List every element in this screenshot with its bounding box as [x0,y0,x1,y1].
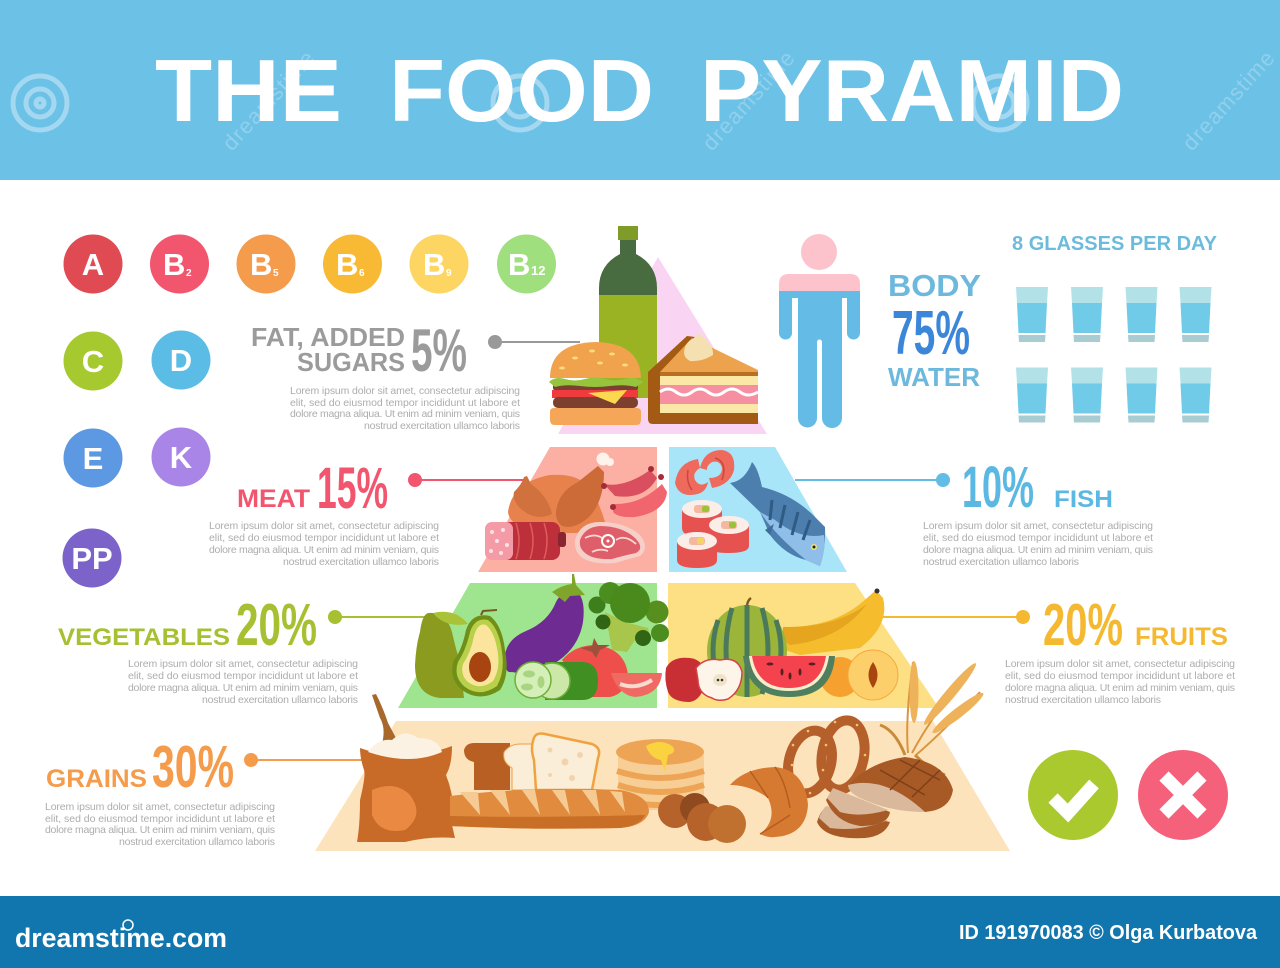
fish heading: 10% [962,455,1034,520]
vitamin B9: B [423,247,445,282]
fat description: Lorem ipsum dolor sit amet, consectetur adipiscing [290,385,520,397]
body water figure [779,234,981,428]
icon: roast chicken [508,452,614,533]
icon: sushi rolls [677,500,749,568]
icon: apple [665,658,742,702]
vegetables section [58,592,425,706]
vitamin B2: 2 [186,268,192,279]
fat heading [251,317,467,384]
icon: peach half [848,650,898,700]
grains heading: GRAINS [46,765,147,793]
meat connector [408,473,525,487]
icon: person [779,234,860,428]
fruits connector [880,610,1030,624]
header banner: dreamstime [697,46,799,155]
fruits heading: 20% [1043,592,1123,658]
fish description: nostrud exercitation ullamco laboris [923,556,1079,568]
vitamin B2 [150,234,209,294]
icon: watermelon slice [743,656,835,697]
fruits description: dolore magna aliqua. Ut enim ad minim veniam, quis [1005,682,1235,694]
icon: orange [820,657,860,697]
icon: bread and slices [464,734,599,790]
grains description [45,801,275,848]
vitamin B2: B [163,247,185,282]
body water text [888,268,981,392]
vitamin E [64,428,122,488]
vegetables description: elit, sed do eiusmod tempor incididunt ut labore et [128,670,358,682]
vitamin B5 [236,234,296,294]
fish heading: FISH [1054,486,1113,513]
icon: whole watermelon [707,598,787,697]
body water text: WATER [888,362,980,392]
icon: broccoli [588,582,669,652]
fruits description: Lorem ipsum dolor sit amet, consectetur adipiscing [1005,658,1235,670]
icon: baguette [450,789,649,829]
title: FOOD [389,41,654,140]
icon: eggplant [505,574,585,673]
vitamin D [152,330,210,390]
vegetables heading [58,592,317,658]
glasses heading: 8 GLASSES PER DAY [1012,233,1218,255]
fruits heading [1043,592,1228,658]
vitamin C: C [82,344,104,379]
icon: challah [658,793,746,843]
pyramid tier backgrounds [315,257,1010,851]
header banner: dreamstime [217,46,319,155]
fruits heading: FRUITS [1135,623,1228,651]
vitamin B5: B [250,247,272,282]
fruits section [880,592,1235,706]
fat description: dolore magna aliqua. Ut enim ad minim veniam, quis [290,408,520,420]
vitamin B5: 5 [273,268,279,279]
fat description: nostrud exercitation ullamco laboris [364,420,520,432]
vitamin PP: PP [71,541,113,576]
vitamin K [152,428,210,486]
vitamin E: E [83,441,103,476]
title: PYRAMID [700,41,1124,140]
grains description: dolore magna aliqua. Ut enim ad minim veniam, quis [45,824,275,836]
vitamin B9 [410,234,468,294]
header banner: dreamstime [1177,46,1279,155]
vegetables description: dolore magna aliqua. Ut enim ad minim veniam, quis [128,682,358,694]
icon: croissant [730,767,808,837]
grains heading [46,734,234,800]
meat description: dolore magna aliqua. Ut enim ad minim veniam, quis [209,544,439,556]
vitamin B12: B [508,247,530,282]
fruits description: nostrud exercitation ullamco laboris [1005,694,1161,706]
vitamin PP [62,528,122,588]
title: THE [155,41,342,140]
icon: tomato [562,638,628,697]
meat section [209,456,525,568]
icon: burger [549,342,643,425]
vegetables heading: VEGETABLES [58,624,230,651]
title [155,41,1124,140]
fish description: dolore magna aliqua. Ut enim ad minim veniam, quis [923,544,1153,556]
fat connector [488,335,580,349]
icon: pancake stack [616,739,704,810]
icon: steak [575,522,645,563]
vegetables description: nostrud exercitation ullamco laboris [202,694,358,706]
grains description: elit, sed do eiusmod tempor incididunt ut labore et [45,813,275,825]
vitamin badges [62,234,556,588]
fat and sugars section [251,317,580,432]
vitamin A [64,234,122,294]
icon: pear [415,612,468,698]
fat description [290,385,520,432]
icon: pretzel [781,717,870,798]
icon: wheat [880,660,986,775]
fish section [795,455,1153,568]
footer bar [0,896,1280,968]
vitamin B12 [497,234,556,294]
icon: flour sack [357,694,455,842]
vitamin B6 [323,234,382,294]
icon: fish [730,462,825,566]
icon: avocado [452,610,507,696]
vitamin K: K [170,440,193,475]
meat description [209,520,439,568]
icon: round bread [848,757,953,812]
meat heading: MEAT [237,485,310,513]
meat description: elit, sed do eiusmod tempor incididunt ut labore et [209,532,439,544]
vegetables connector [328,610,425,624]
grains heading: 30% [152,734,234,800]
vitamin B9: 9 [446,268,452,279]
vegetables heading: 20% [236,592,317,658]
header banner [0,0,1280,180]
meat heading [237,456,388,521]
vitamin B6: B [336,247,358,282]
fat heading: SUGARS [297,347,405,377]
fish connector [795,473,950,487]
icon: bottle [599,226,657,398]
icon: salami [485,522,566,560]
icon: shrimps [675,450,734,495]
icon: tomato wedge [611,673,662,697]
vitamin D: D [170,343,192,378]
vegetables description: Lorem ipsum dolor sit amet, consectetur adipiscing [128,658,358,670]
body water text: 75% [892,299,970,368]
icon: cross mark [1138,750,1228,840]
fish description: elit, sed do eiusmod tempor incididunt ut labore et [923,532,1153,544]
fat description: elit, sed do eiusmod tempor incididunt ut labore et [290,397,520,409]
fat heading: 5% [411,317,467,384]
meat description: Lorem ipsum dolor sit amet, consectetur adipiscing [209,520,439,532]
vitamin B6: 6 [359,268,365,279]
fruits description [1005,658,1235,706]
vitamin A: A [82,247,104,282]
vegetables description [128,658,358,706]
grains description: Lorem ipsum dolor sit amet, consectetur adipiscing [45,801,275,813]
icon: cake slice [648,334,758,424]
footer logo: dreamstime.com [15,923,227,953]
meat heading: 15% [317,456,388,521]
icon: check mark [1028,750,1118,840]
vitamin B12: 12 [531,263,545,278]
icon: bananas [783,588,884,655]
meat description: nostrud exercitation ullamco laboris [283,556,439,568]
water glasses [1016,287,1212,422]
icon: bread slices [817,788,890,838]
grains description: nostrud exercitation ullamco laboris [119,836,275,848]
body water text: BODY [888,268,981,303]
icon: sausages [601,466,667,517]
fish description [923,520,1153,568]
fruits description: elit, sed do eiusmod tempor incididunt ut labore et [1005,670,1235,682]
icon: cucumber [515,662,598,700]
fish description: Lorem ipsum dolor sit amet, consectetur adipiscing [923,520,1153,532]
footer credit: ID 191970083 © Olga Kurbatova [959,922,1258,944]
vitamin C [64,332,122,390]
grains connector [244,753,365,767]
fat heading: FAT, ADDED [251,322,405,352]
grains section [45,734,365,848]
